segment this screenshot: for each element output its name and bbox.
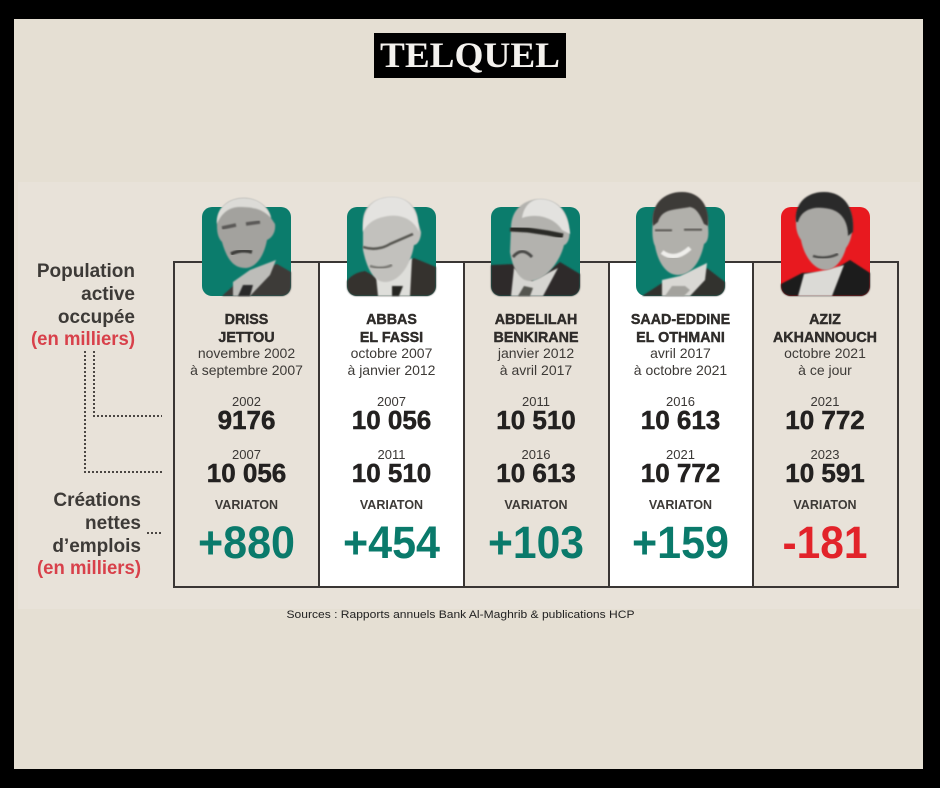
left label: créations nettes d'emplois [37,490,141,579]
column: Abdelilah Benkirane: 2016 [522,447,550,462]
column: Abdelilah Benkirane: 10 510 [496,405,576,435]
column: Saad-Eddine El Othmani: VARIATON [649,498,712,512]
column: Saad-Eddine El Othmani: SAAD-EDDINE [631,312,730,328]
column: Abdelilah Benkirane: janvier 2012 [497,345,574,361]
left label: créations nettes d'emplois: Créations [53,490,141,511]
column: Driss Jettou: à septembre 2007 [190,362,303,378]
column: Aziz Akhannouch [773,192,877,568]
column: Abbas El Fassi: octobre 2007 [351,345,433,361]
column: Saad-Eddine El Othmani: +159 [632,517,729,568]
column: Aziz Akhannouch: à ce jour [798,362,852,378]
column: Aziz Akhannouch: AZIZ [809,312,841,328]
column: Abbas El Fassi: VARIATON [360,498,423,512]
column: Abbas El Fassi: EL FASSI [360,330,423,346]
column: Driss Jettou: novembre 2002 [198,345,295,361]
column: Abdelilah Benkirane: +103 [488,517,584,568]
column: Aziz Akhannouch: 10 591 [785,458,865,488]
column: Aziz Akhannouch: 10 772 [785,405,865,435]
column: Driss Jettou: JETTOU [218,330,275,346]
column: Saad-Eddine El Othmani: avril 2017 [650,345,711,361]
chart background band [18,182,920,609]
column: Aziz Akhannouch: VARIATON [793,498,857,512]
name and dates: DRISS [225,312,268,328]
figures: 2002 [232,394,261,409]
portrait: Saad-Eddine El Othmani [636,192,725,296]
column: Saad-Eddine El Othmani: 2021 [666,447,695,462]
column: Aziz Akhannouch: octobre 2021 [784,345,866,361]
column: Driss Jettou: VARIATON [215,498,278,512]
column: Abbas El Fassi [343,197,440,568]
portrait: Abdelilah Benkirane [491,199,580,296]
column: Saad-Eddine El Othmani: à octobre 2021 [634,362,727,378]
column: Aziz Akhannouch: 2021 [811,394,839,409]
column: Abbas El Fassi: ABBAS [366,312,417,328]
column: Abdelilah Benkirane: VARIATON [504,498,568,512]
left label: population active occupée: (en milliers) [31,329,135,350]
column: Driss Jettou: +880 [198,517,295,568]
dotted connectors [85,351,163,533]
left label: créations nettes d'emplois: (en milliers) [37,558,141,579]
column: Driss Jettou: 10 056 [207,458,286,488]
column: Abdelilah Benkirane: BENKIRANE [494,330,578,346]
column: Saad-Eddine El Othmani: 10 613 [641,405,720,435]
column: Saad-Eddine El Othmani: 2016 [666,394,695,409]
left label: créations nettes d'emplois: d’emplois [52,536,141,557]
column: Saad-Eddine El Othmani [631,192,730,568]
column: Abbas El Fassi: 10 510 [352,458,431,488]
column: Driss Jettou: 9176 [218,405,275,435]
sources note: Sources : Rapports annuels Bank Al-Maghrib & publications HCP [286,609,634,621]
column: Driss Jettou: 2007 [232,447,261,462]
left label: population active occupée: active [81,284,135,305]
column: Abbas El Fassi: à janvier 2012 [348,362,436,378]
column: Abbas El Fassi: 2011 [378,447,405,462]
column: Saad-Eddine El Othmani: 10 772 [641,458,720,488]
column: Abdelilah Benkirane: 2011 [522,394,550,409]
column: Abbas El Fassi: 2007 [377,394,406,409]
column: Abbas El Fassi: 10 056 [352,405,431,435]
column: Abdelilah Benkirane [488,199,584,568]
left label: population active occupée [31,261,135,350]
column: Aziz Akhannouch: 2023 [811,447,839,462]
left label: population active occupée: occupée [58,307,135,328]
logo: Telquel: TELQUEL [380,35,560,75]
column: Aziz Akhannouch: AKHANNOUCH [773,330,877,346]
column: Abdelilah Benkirane: ABDELILAH [495,312,577,328]
column: Driss Jettou [190,198,303,568]
portrait: Driss Jettou [202,198,291,296]
column: Abbas El Fassi: +454 [343,517,440,568]
left label: population active occupée: Population [37,261,135,282]
portrait: Abbas El Fassi [347,197,436,296]
column: Abdelilah Benkirane: à avril 2017 [500,362,572,378]
column: Aziz Akhannouch: -181 [782,517,868,568]
column: Abdelilah Benkirane: 10 613 [496,458,576,488]
table of five governments [174,262,898,587]
column: Saad-Eddine El Othmani: EL OTHMANI [636,330,725,346]
portrait: Aziz Akhannouch [781,192,870,296]
left label: créations nettes d'emplois: nettes [85,513,141,534]
